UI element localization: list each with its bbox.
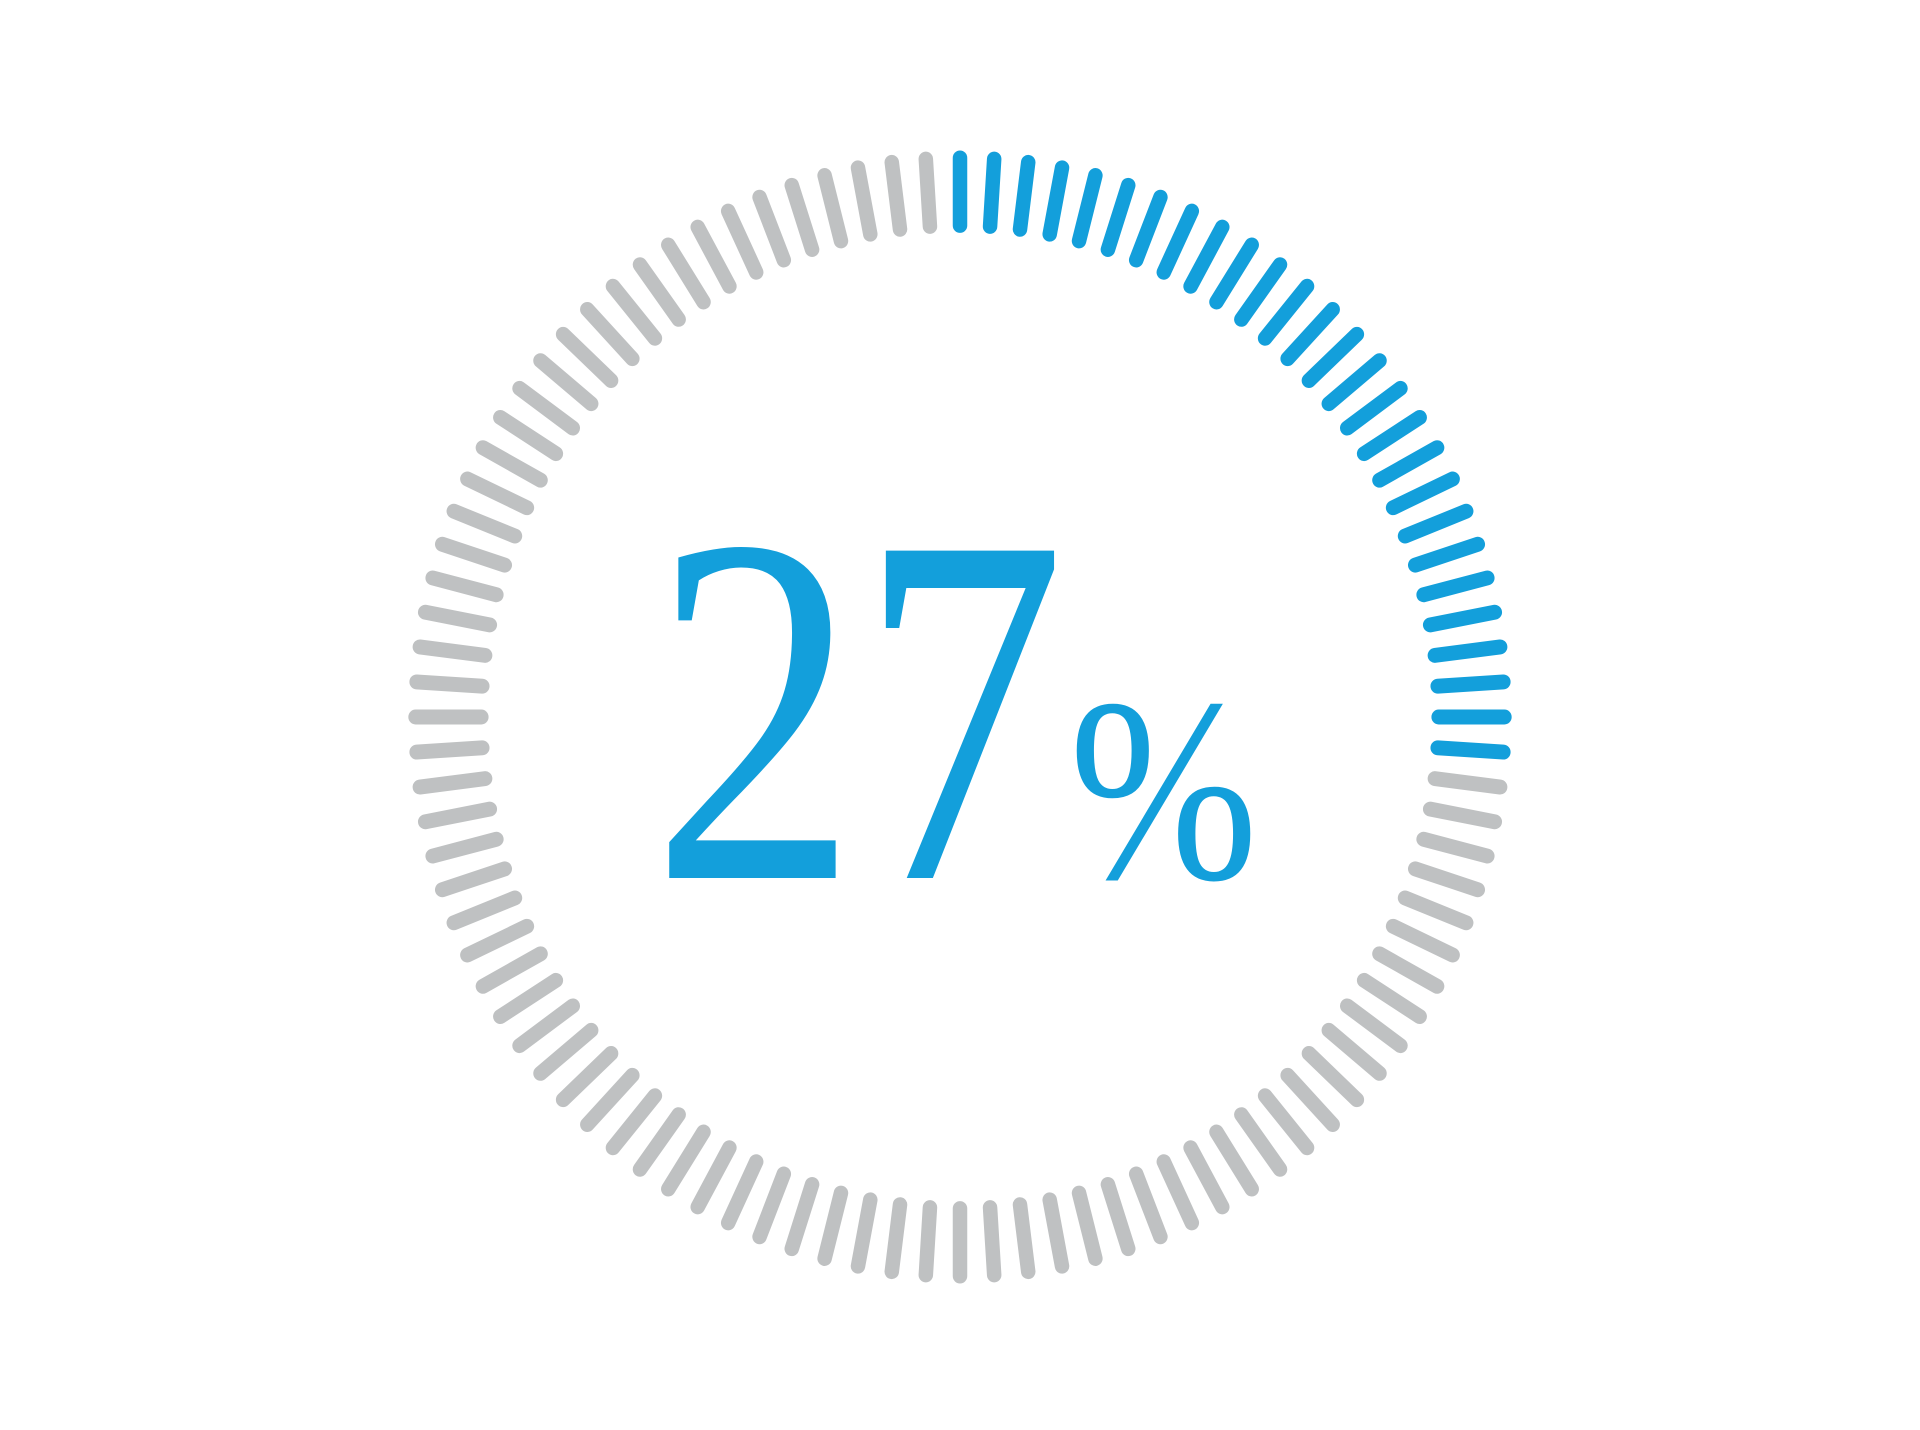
- big number: 27%: %: [1069, 645, 1258, 935]
- gauge ticks: [342, 116, 1564, 1322]
- big number: 27%: 27: [651, 433, 1066, 987]
